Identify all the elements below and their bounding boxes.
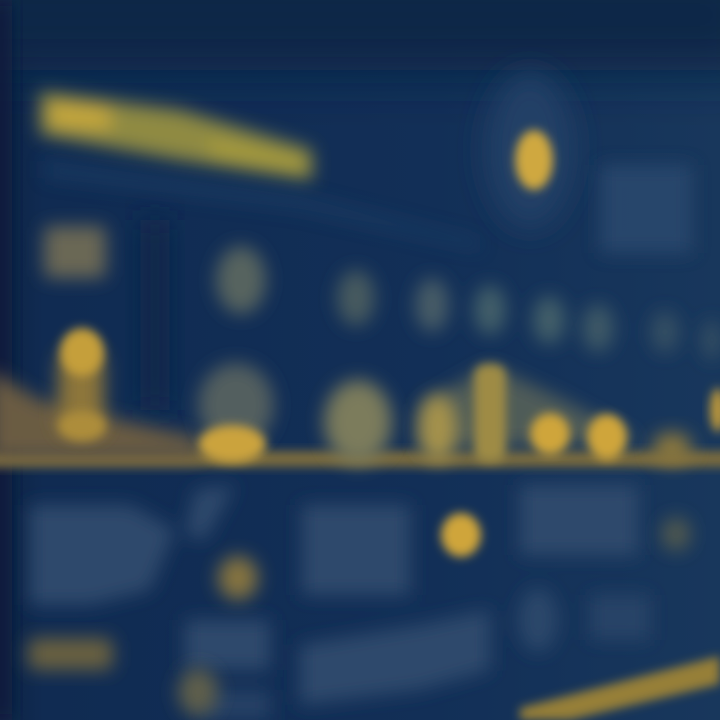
block 2 [185,485,235,540]
icon 5 [474,285,506,335]
lower text blocks [30,485,650,720]
block 6 [300,610,490,705]
block 5 [185,620,270,670]
title block [40,92,312,180]
icon 1 [44,226,106,278]
lower left label [28,638,113,670]
icon 2 [216,246,266,314]
icon: padlock tower [486,72,574,228]
icon 8 [651,311,679,353]
marker 1 base [58,411,106,441]
icon 9 [702,320,720,360]
block 1 [30,505,175,605]
marker 5 [474,364,506,462]
block 3 [302,505,410,595]
subtitle rule [45,160,480,250]
icon 7 [582,304,614,352]
block 8 [590,595,650,640]
marker 9 [710,388,720,432]
dot 4 [178,668,218,716]
marker 3 [324,380,392,464]
block 4 [520,485,638,555]
marker 8 [652,432,692,464]
dot 2 [218,556,258,600]
gold column markers [58,328,720,464]
icon 6 [533,296,565,344]
marker 6 [530,413,570,455]
gold dots lower [178,513,691,716]
gold timeline band [0,365,720,467]
marker 1 [58,350,104,435]
block 9 [200,690,270,720]
row of upper icons [44,226,720,360]
marker 2 arch [198,363,274,447]
building panel [600,165,692,253]
dot 1 [441,513,481,557]
block 7 [518,588,558,652]
marker 7 [587,414,627,460]
icon 4 [415,278,449,332]
icon 3 [337,270,375,326]
dot 3 [661,517,691,551]
marker 1 glow [60,328,104,376]
marker 4 [419,394,457,462]
diagonal gold bar [520,656,720,720]
marker 2 base [198,425,266,463]
